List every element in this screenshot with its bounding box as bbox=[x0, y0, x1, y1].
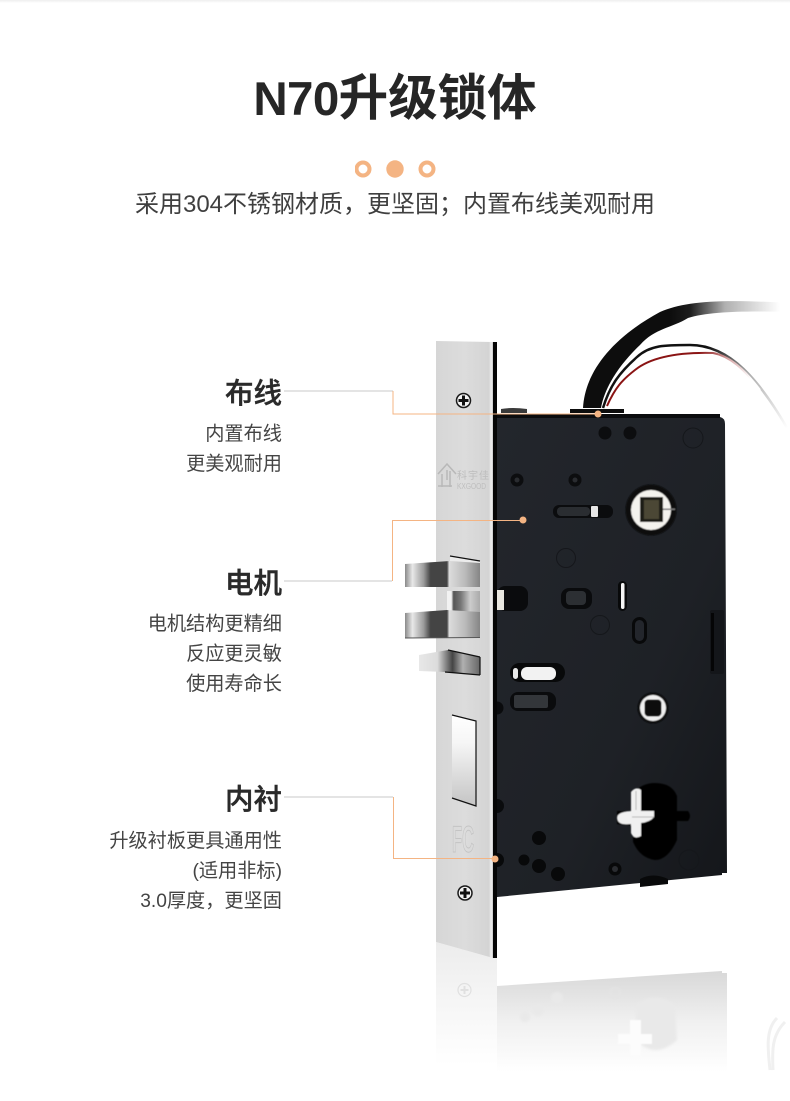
faceplate: FC bbox=[452, 819, 474, 860]
subtitle: 采用304不锈钢材质，更坚固；内置布线美观耐用 bbox=[135, 191, 655, 218]
text: lining: (适用非标) bbox=[192, 861, 282, 882]
text: motor: 使用寿命长 bbox=[186, 674, 282, 695]
heading: motor: 电机 bbox=[225, 568, 282, 600]
bottom screw bbox=[458, 886, 472, 900]
reflection under the lock bbox=[436, 942, 785, 1072]
text: lining: 升级衬板更具通用性 bbox=[109, 831, 282, 852]
text: wiring: 更美观耐用 bbox=[186, 454, 282, 475]
callout: lining bbox=[284, 797, 498, 862]
text: motor: 电机结构更精细 bbox=[148, 614, 282, 635]
black lock case bbox=[497, 408, 727, 897]
logo on faceplate bbox=[438, 464, 490, 491]
text: wiring bbox=[186, 424, 282, 475]
logo on faceplate: 科宇佳 bbox=[457, 469, 490, 482]
text: wiring: 内置布线 bbox=[205, 424, 282, 445]
heading: wiring: 布线 bbox=[225, 378, 282, 410]
faceplate bbox=[436, 341, 497, 958]
upper spindle hub bbox=[626, 484, 676, 536]
callout: wiring bbox=[284, 391, 602, 418]
text: motor: 反应更灵敏 bbox=[186, 644, 282, 665]
square window bbox=[452, 715, 476, 806]
keyhole bbox=[617, 783, 690, 860]
title: N70升级锁体 bbox=[253, 71, 537, 126]
text: lining bbox=[109, 830, 282, 912]
heading: lining: 内衬 bbox=[225, 784, 282, 816]
holes and slots bbox=[497, 426, 724, 887]
bolts bbox=[405, 556, 480, 675]
top screw bbox=[456, 394, 470, 408]
text: lining: 3.0厚度，更坚固 bbox=[140, 891, 282, 912]
lower spindle hub bbox=[638, 692, 668, 724]
logo on faceplate: KXGOOD bbox=[457, 481, 486, 491]
decoration: three orange dots bbox=[355, 160, 436, 178]
wires bbox=[583, 301, 790, 433]
text: motor bbox=[148, 614, 282, 695]
callout: motor bbox=[284, 516, 526, 581]
